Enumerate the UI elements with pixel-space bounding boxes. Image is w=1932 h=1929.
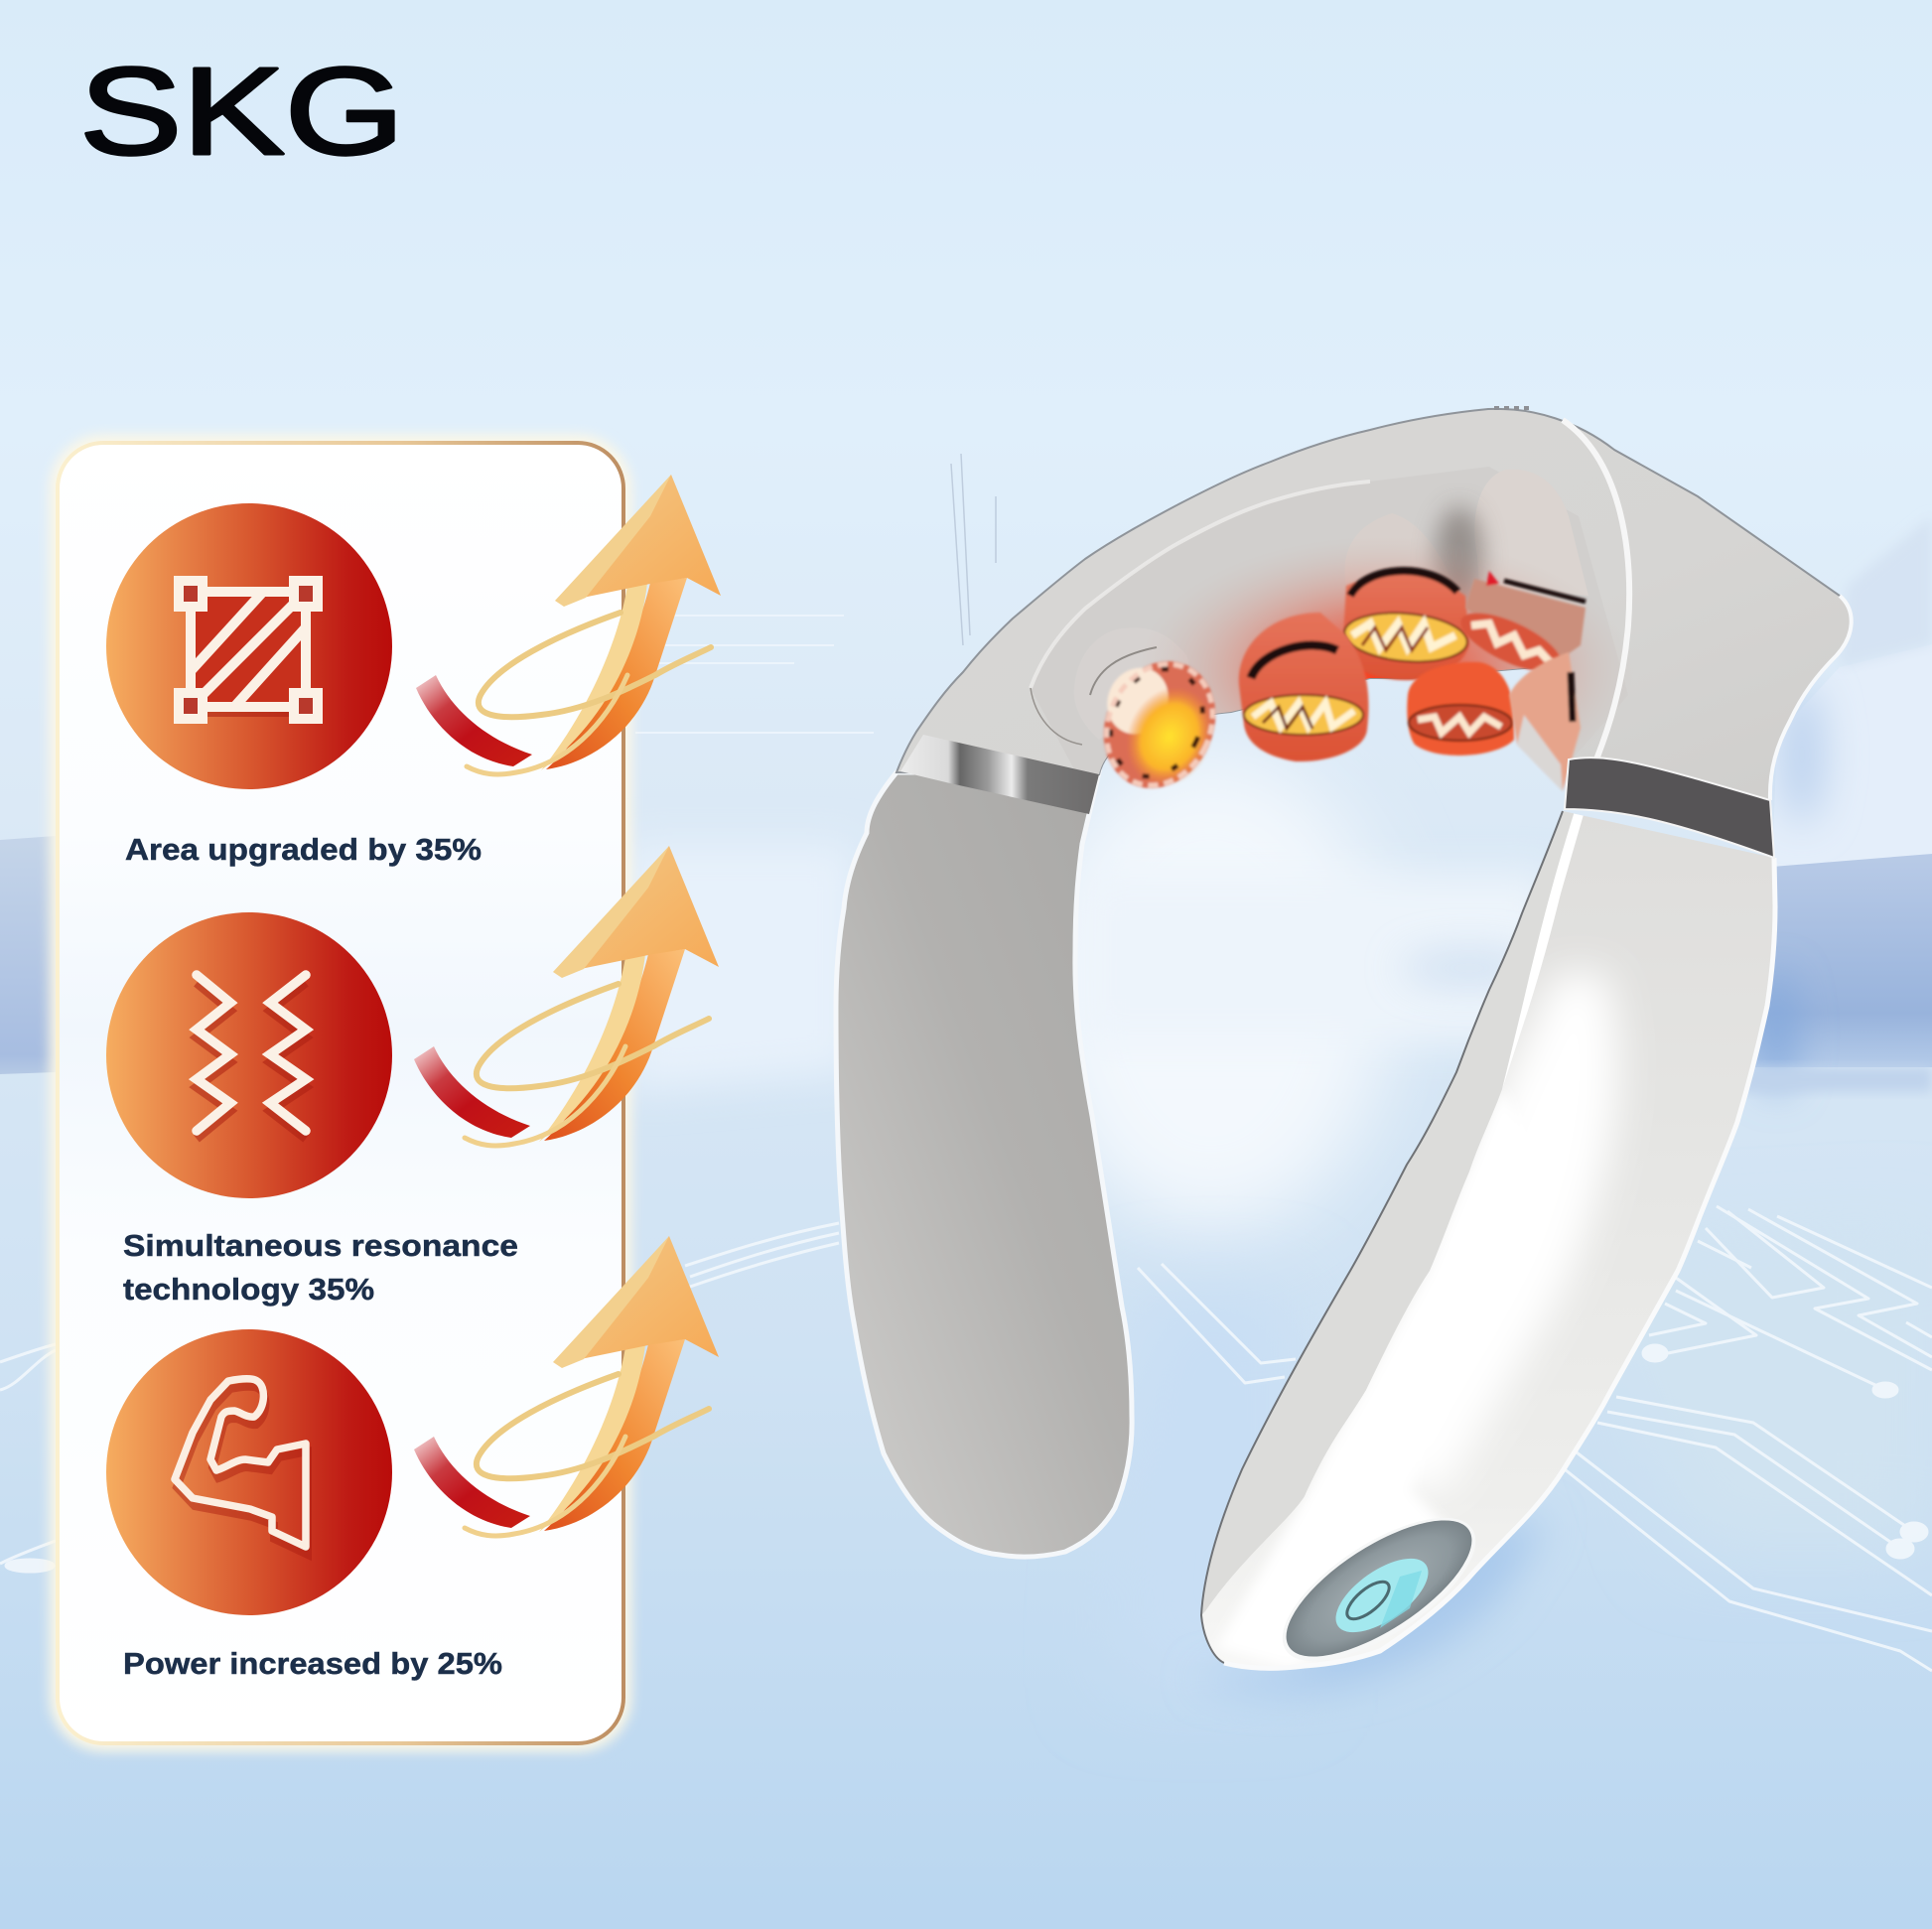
massage head 5 (1453, 571, 1586, 683)
massage head 4 (1407, 662, 1514, 756)
massage head 1 (1083, 642, 1236, 807)
panel: upgrade features card (50, 435, 631, 1751)
logo: SKG (79, 42, 404, 181)
icon disc: power (106, 1329, 392, 1615)
label: power increased: Power increased by 25% (123, 1646, 502, 1681)
arrow 3 (414, 1236, 719, 1536)
control button (1261, 1490, 1497, 1689)
massage head 3 (1342, 571, 1469, 680)
neck yoke (897, 408, 1852, 804)
label: simultaneous resonance: technology 35% (123, 1272, 374, 1307)
icon disc: area (106, 503, 392, 789)
arrow 1 (416, 475, 721, 774)
label: area upgraded: Area upgraded by 35% (125, 832, 482, 867)
right arm (1201, 811, 1775, 1668)
massage head 6 (1509, 652, 1581, 791)
icon disc: resonance (106, 912, 392, 1198)
left metal band (900, 735, 1099, 814)
right dark band (1565, 758, 1774, 858)
arrow 2 (414, 846, 719, 1146)
label: simultaneous resonance: Simultaneous resonance (123, 1228, 518, 1263)
circuit lines background (0, 1206, 1932, 1671)
left arm (836, 772, 1132, 1557)
product: neck massager (836, 408, 1852, 1689)
massage head 2 (1239, 613, 1369, 761)
